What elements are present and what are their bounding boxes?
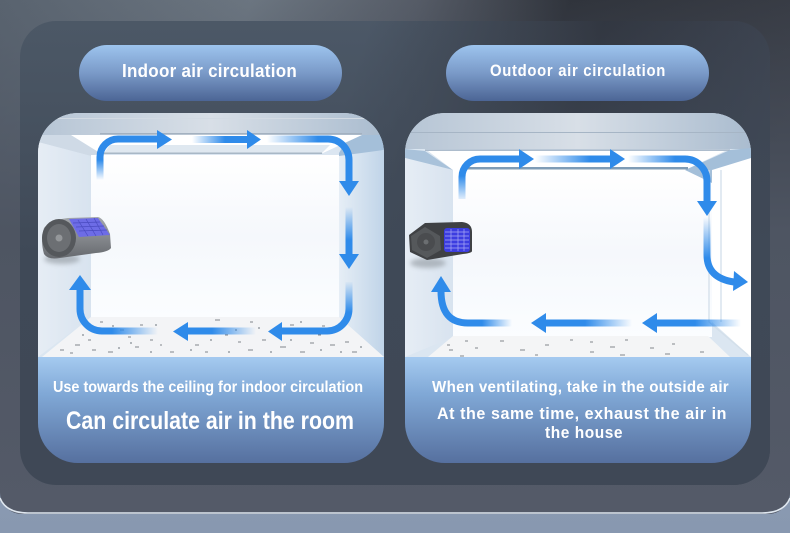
- room illustration: indoor: [38, 113, 384, 357]
- caption block: indoor: [38, 357, 384, 463]
- caption block: outdoor: At the same time, exhaust the air in: [437, 404, 727, 423]
- arrow: ceiling start, curved: [100, 130, 172, 180]
- arrow: top right corner: [628, 159, 717, 216]
- arrow: floor middle: [531, 313, 632, 333]
- arrow: right side down: [339, 207, 359, 269]
- heading pill: outdoor: [446, 45, 709, 101]
- arrow: ceiling middle: [535, 149, 625, 169]
- caption block: outdoor: [405, 357, 751, 463]
- arrow: floor to device: [69, 275, 158, 331]
- panel: indoor air circulation: [38, 113, 384, 463]
- arrow: floor middle: [173, 322, 256, 341]
- icon: purifier device, ceiling facing: [42, 217, 111, 264]
- caption block: outdoor: the house: [545, 423, 623, 442]
- heading pill: outdoor: Outdoor air circulation: [490, 61, 666, 80]
- arrow: floor to device: [431, 276, 512, 323]
- caption block: indoor: Can circulate air in the room: [66, 407, 354, 435]
- room illustration: outdoor: [405, 113, 751, 357]
- icon: purifier device, window facing: [409, 222, 472, 268]
- heading pill: indoor: Indoor air circulation: [122, 60, 297, 81]
- arrow: top right corner: [267, 139, 359, 196]
- arrow: exit through window: [707, 217, 748, 291]
- arrow: intake from window: [642, 313, 741, 333]
- arrow: ceiling middle: [192, 130, 261, 149]
- arrow: bottom right corner: [268, 282, 349, 341]
- panel: outdoor air circulation: [405, 113, 751, 463]
- caption block: indoor: Use towards the ceiling for indoor circulation: [53, 379, 363, 396]
- arrow: ceiling start, curved: [462, 149, 534, 199]
- caption block: outdoor: When ventilating, take in the outside air: [432, 379, 729, 396]
- heading pill: indoor: [79, 45, 342, 101]
